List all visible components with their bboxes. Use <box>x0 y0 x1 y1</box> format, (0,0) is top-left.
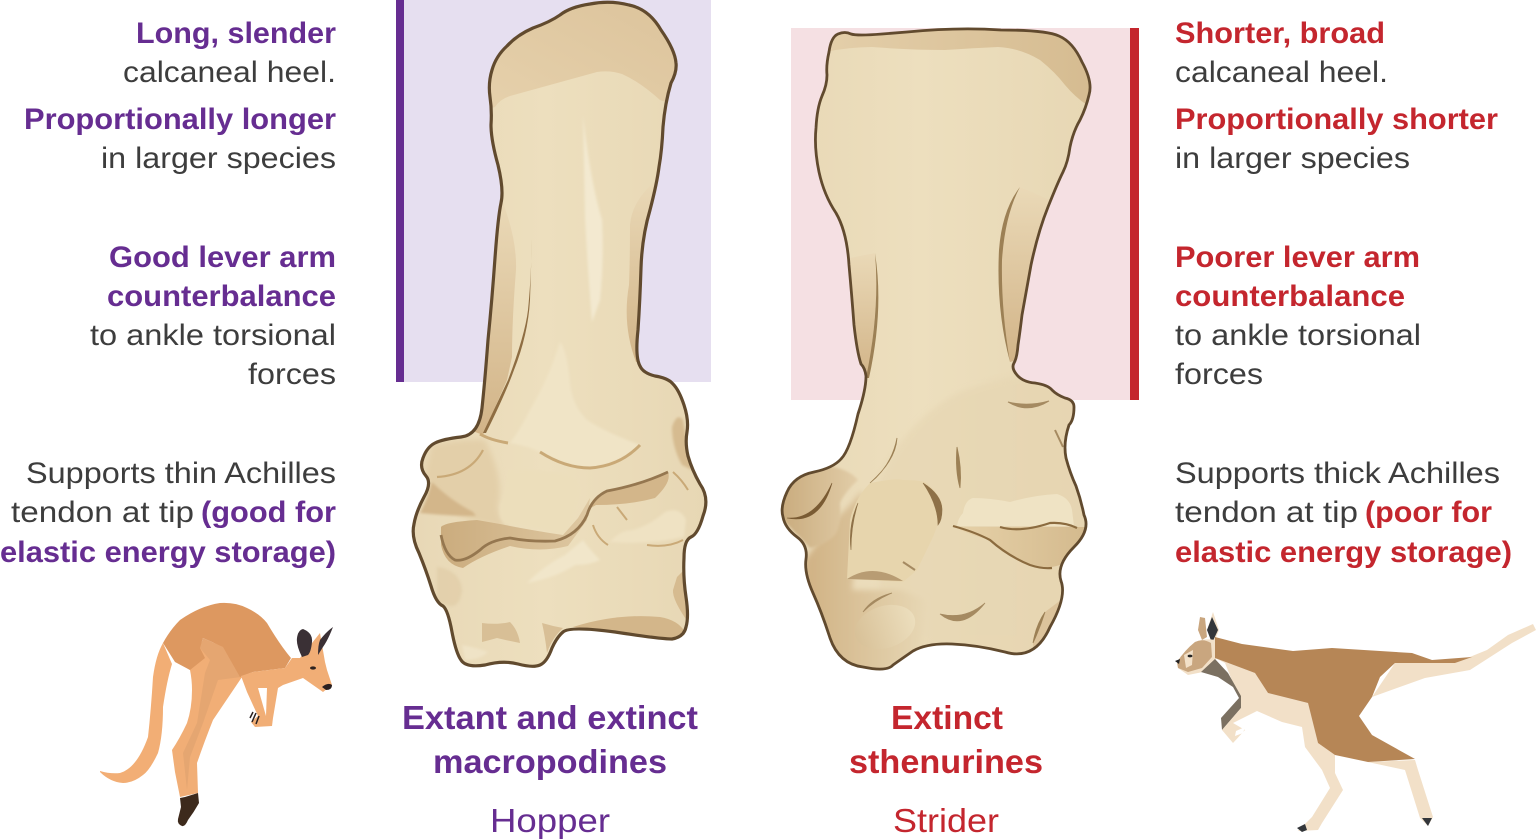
text block: strider proportional length <box>1175 103 1498 175</box>
caption: strider group: Extinct <box>891 699 1003 736</box>
text block: strider lever arm: forces <box>1175 358 1263 391</box>
text block: strider lever arm: to ankle torsional <box>1175 319 1421 352</box>
text block: hopper Achilles tendon: tendon at tip <box>11 496 194 529</box>
text block: strider Achilles tendon: (poor for <box>1365 496 1492 529</box>
text block: hopper lever arm: counterbalance <box>107 280 336 313</box>
panel: strider background with red bar <box>791 28 1139 400</box>
illustration: strider calcaneus bone <box>778 20 1100 674</box>
text block: hopper lever arm: Good lever arm <box>109 241 336 274</box>
text block: hopper Achilles tendon: Supports thin Achilles <box>26 457 336 490</box>
text block: hopper lever arm: to ankle torsional <box>90 319 336 352</box>
text block: strider lever arm: Poorer lever arm <box>1175 241 1420 274</box>
caption: hopper group: macropodines <box>433 743 667 780</box>
icon: hopping kangaroo <box>100 603 333 826</box>
text block: hopper Achilles tendon <box>0 457 336 569</box>
text block: strider proportional length: in larger species <box>1175 142 1410 175</box>
text block: strider Achilles tendon: elastic energy storage) <box>1175 536 1512 569</box>
text block: strider lever arm: counterbalance <box>1175 280 1405 313</box>
caption: hopper group: Extant and extinct <box>402 699 698 736</box>
text block: strider heel shape: Shorter, broad <box>1175 17 1385 50</box>
caption: hopper group: Hopper <box>490 802 610 839</box>
text block: hopper heel shape: calcaneal heel. <box>123 56 336 89</box>
text block: hopper lever arm <box>90 241 336 391</box>
text block: strider heel shape: calcaneal heel. <box>1175 56 1388 89</box>
icon: striding sthenurine <box>1175 612 1536 832</box>
caption: hopper group <box>402 699 698 839</box>
text block: strider lever arm <box>1175 241 1421 391</box>
text block: strider Achilles tendon: Supports thick Achilles <box>1175 457 1500 490</box>
text block: strider heel shape <box>1175 17 1388 89</box>
text block: hopper Achilles tendon: elastic energy storage) <box>0 536 336 569</box>
caption: strider group: Strider <box>893 802 999 839</box>
text block: hopper proportional length: Proportionally longer <box>24 103 336 136</box>
text block: hopper proportional length <box>24 103 336 175</box>
panel: hopper background with purple bar <box>396 0 711 382</box>
text block: strider Achilles tendon: tendon at tip <box>1175 496 1358 529</box>
text block: hopper proportional length: in larger species <box>101 142 336 175</box>
text block: hopper Achilles tendon: (good for <box>201 496 336 529</box>
caption: strider group <box>849 699 1043 839</box>
text block: hopper lever arm: forces <box>248 358 336 391</box>
text block: strider Achilles tendon <box>1175 457 1512 569</box>
text block: hopper heel shape: Long, slender <box>136 17 336 50</box>
illustration: hopper calcaneus bone <box>413 0 706 666</box>
text block: strider proportional length: Proportionally shorter <box>1175 103 1498 136</box>
caption: strider group: sthenurines <box>849 743 1043 780</box>
text block: hopper heel shape <box>123 17 336 89</box>
